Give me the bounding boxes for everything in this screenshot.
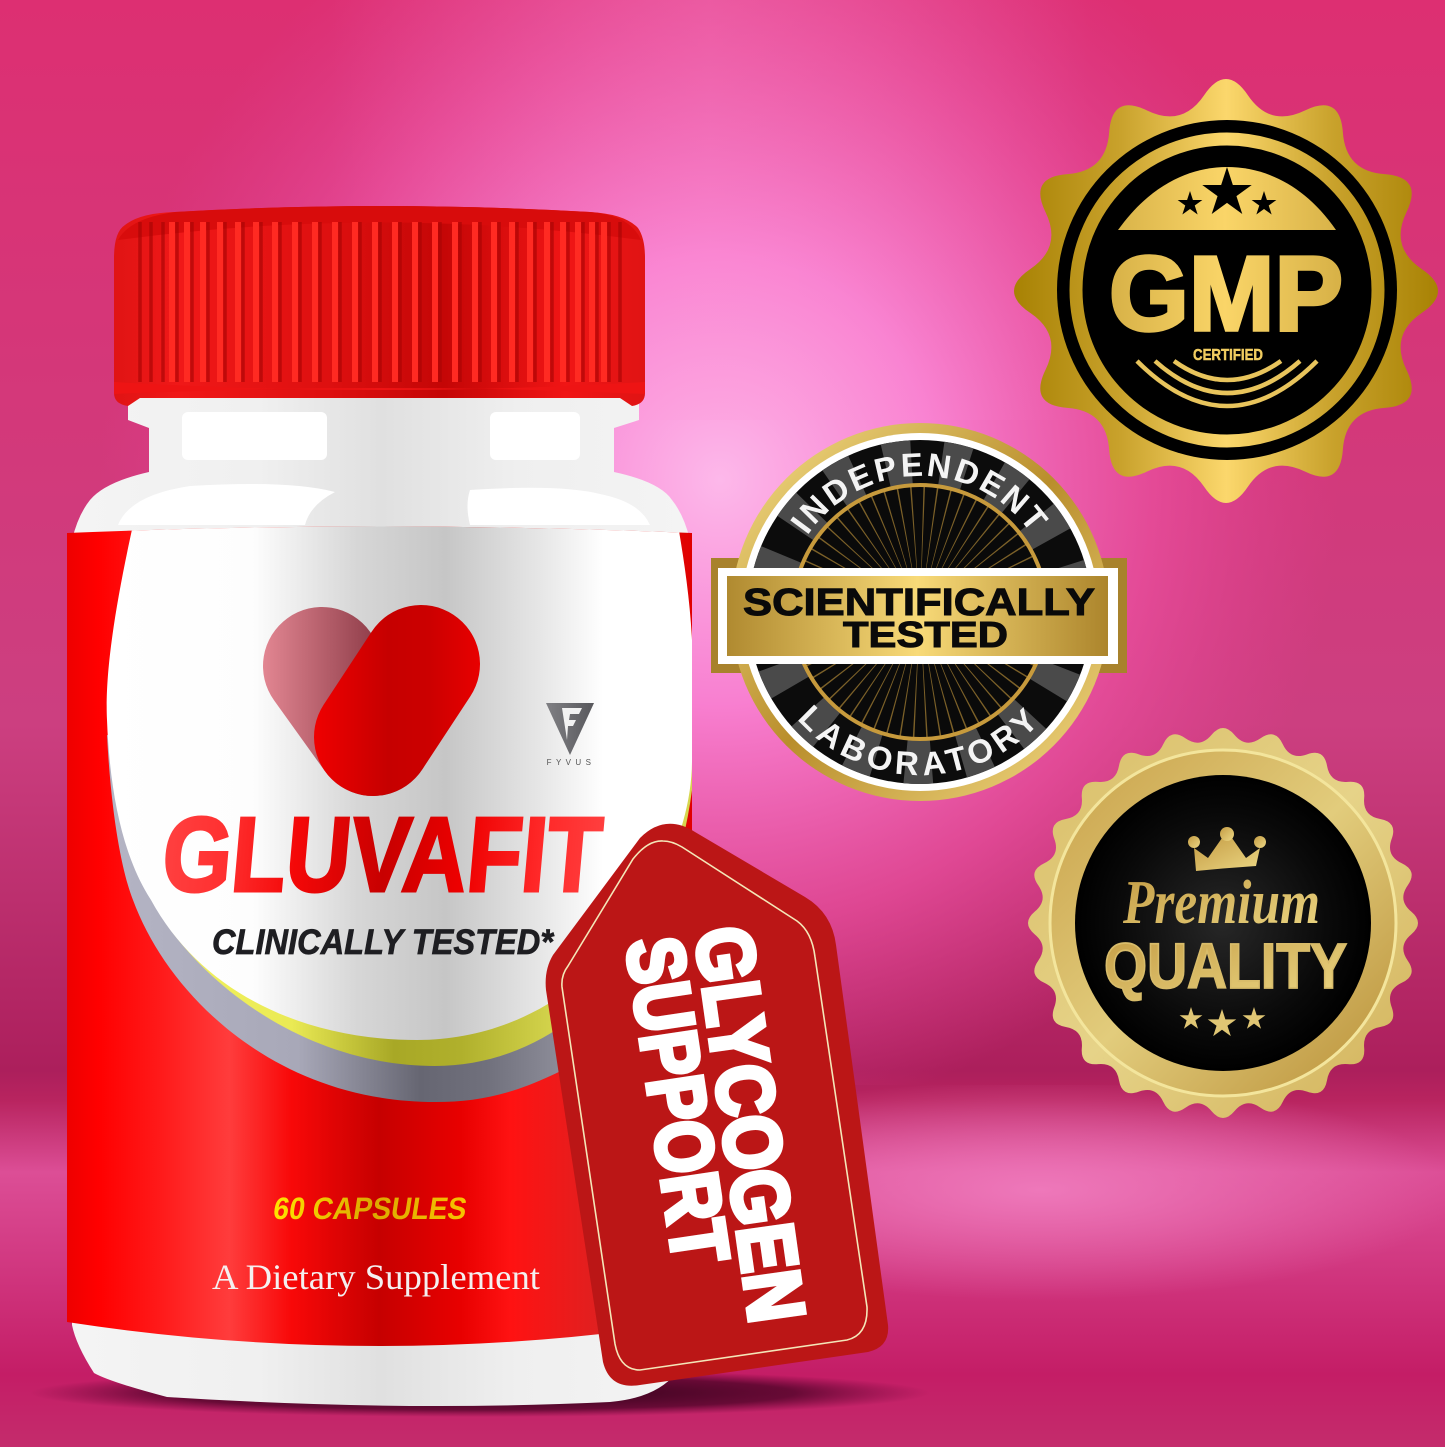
stars bbox=[1180, 1007, 1265, 1036]
bright ring bbox=[1050, 750, 1396, 1096]
scalloped gold seal bbox=[1025, 725, 1421, 1121]
bottle neck and shoulder bbox=[72, 397, 690, 1406]
bottle floor shadow bbox=[30, 1369, 930, 1417]
supplement bottle bbox=[67, 206, 692, 1406]
glycogen support tag bbox=[546, 824, 888, 1386]
premium script word: Premium bbox=[1122, 869, 1320, 937]
scientifically tested badge bbox=[711, 423, 1127, 801]
premium quality badge bbox=[1025, 725, 1421, 1121]
inner gold circle bbox=[793, 485, 1047, 739]
clinically tested line: CLINICALLY TESTED* bbox=[212, 923, 554, 962]
icon: FYVUS brand mark: FYVUS bbox=[547, 758, 595, 767]
icon: heart capsule logo bbox=[322, 664, 421, 737]
red screw cap bbox=[114, 206, 645, 406]
dietary supplement line: A Dietary Supplement bbox=[212, 1257, 540, 1297]
neck highlights bbox=[118, 412, 650, 525]
tag stitched outline bbox=[562, 841, 867, 1370]
scalloped gold seal bbox=[1010, 75, 1442, 507]
gold rim bbox=[731, 423, 1109, 801]
stars bbox=[1178, 167, 1276, 215]
banner tabs bbox=[711, 558, 1127, 673]
GMP word: GMP bbox=[1109, 235, 1343, 353]
quality word: QUALITY bbox=[1104, 930, 1347, 1002]
tag word: glycogen: GLYCOGEN bbox=[678, 921, 822, 1327]
icon: FYVUS brand mark bbox=[546, 703, 595, 767]
independent arc text: INDEPENDENT bbox=[790, 453, 1049, 534]
icon: crown bbox=[1188, 827, 1266, 871]
dark ring bbox=[748, 440, 1092, 784]
tag word: support: SUPPORT bbox=[609, 931, 746, 1269]
scientifically word: SCIENTIFICALLY bbox=[743, 582, 1095, 624]
gold sunburst bbox=[855, 547, 985, 677]
tested word: TESTED bbox=[843, 614, 1008, 655]
white label panel bbox=[107, 525, 692, 1040]
black disc bbox=[1057, 120, 1397, 460]
red wrap label bbox=[67, 526, 692, 1346]
black disc bbox=[1075, 775, 1371, 1071]
gold dome bbox=[1118, 167, 1336, 230]
label swoosh bands bbox=[107, 525, 692, 1102]
smile arcs bbox=[1137, 361, 1317, 406]
gold ring bbox=[1076, 139, 1378, 441]
capsule count: 60 CAPSULES bbox=[271, 1191, 469, 1226]
laboratory arc text: LABORATORY bbox=[798, 704, 1034, 776]
white banner frame bbox=[718, 568, 1118, 664]
product name: GLUVAFIT bbox=[158, 795, 606, 914]
grey band bbox=[107, 735, 600, 1102]
GMP certified badge bbox=[1010, 75, 1442, 507]
gold banner bbox=[727, 576, 1108, 656]
certified word: CERTIFIED bbox=[1193, 347, 1263, 364]
yellow band bbox=[167, 760, 692, 1066]
tag body bbox=[546, 824, 888, 1386]
